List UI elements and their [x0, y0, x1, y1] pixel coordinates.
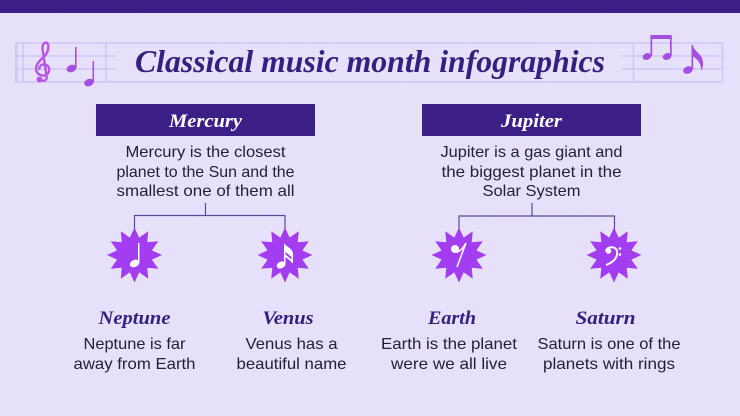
text: Jupiter description: the biggest planet in the: [442, 164, 622, 181]
text: Jupiter description: Solar System: [482, 183, 580, 200]
item: Earth: Earth: [427, 308, 476, 329]
item: Earth: [381, 308, 518, 373]
icon: quarter note badge: [107, 228, 162, 282]
item: Neptune: away from Earth: [74, 356, 196, 373]
heading: Mercury: Mercury: [168, 111, 243, 132]
item: Venus: Venus has a: [246, 336, 338, 353]
icon: eighth rest badge: [432, 228, 486, 282]
heading: Jupiter: [422, 104, 641, 136]
item: Earth: Earth is the planet: [381, 336, 518, 353]
item: Venus: [236, 308, 347, 373]
heading: Mercury: [96, 104, 315, 136]
icon: bass clef badge: [586, 228, 642, 282]
item: Saturn: Saturn: [576, 308, 636, 329]
icon: right notes: [642, 35, 703, 75]
item: Earth: were we all live: [390, 356, 507, 373]
connector: [134, 203, 285, 232]
icon: left notes: [66, 47, 95, 88]
item: Saturn: [538, 308, 681, 373]
top bar: [0, 0, 740, 13]
item: Venus: beautiful name: [236, 356, 347, 373]
text: Mercury description: smallest one of them all: [116, 183, 294, 200]
text: Mercury description: planet to the Sun and the: [116, 164, 295, 181]
music staff decoration: [15, 43, 723, 82]
item: Saturn: planets with rings: [543, 356, 675, 373]
panel: Mercury: [96, 104, 315, 232]
item: Neptune: Neptune: [97, 308, 171, 329]
item: Venus: Venus: [262, 308, 314, 329]
text: Jupiter description: [440, 144, 622, 200]
title: Classical music month infographics: [135, 43, 605, 79]
text: Mercury description: [116, 144, 295, 200]
icon: beamed note badge: [258, 228, 312, 282]
connector: [459, 203, 614, 232]
text: Jupiter description: Jupiter is a gas giant and: [440, 144, 622, 161]
item: Neptune: [74, 308, 196, 373]
icon: treble clef: [36, 43, 49, 81]
item: Neptune: Neptune is far: [84, 336, 186, 353]
text: Mercury description: Mercury is the closest: [126, 144, 286, 161]
panel: Jupiter: [422, 104, 641, 232]
item: Saturn: Saturn is one of the: [538, 336, 681, 353]
heading: Jupiter: Jupiter: [500, 111, 563, 132]
